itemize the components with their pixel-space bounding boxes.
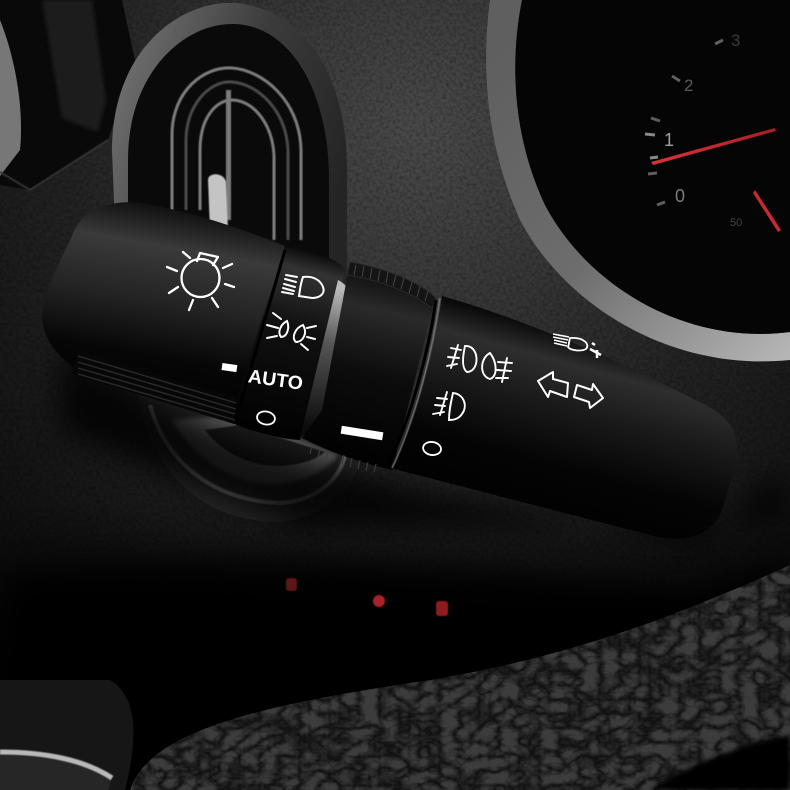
- icon: high beam: [282, 275, 324, 298]
- instrument cluster: [486, 0, 790, 361]
- gauge ticks: [645, 40, 723, 205]
- gauge numbers: [664, 31, 742, 229]
- icon: front fog light: [433, 392, 465, 420]
- gauge numbers: 3: [731, 31, 740, 50]
- light stalk: [42, 202, 737, 539]
- gauge numbers: 1: [664, 130, 674, 150]
- icon: right arrow: [574, 384, 603, 408]
- icon: side lights: [267, 313, 316, 350]
- side panel top left: [0, 0, 135, 190]
- mark: middle position line: [341, 426, 383, 440]
- lower black dash area: [0, 560, 790, 790]
- gauge numbers: 2: [684, 76, 693, 95]
- stalk shadow: [60, 350, 790, 545]
- air vent lower: [138, 395, 362, 522]
- gauge numbers: 50: [730, 217, 742, 229]
- bottom left trim: [0, 680, 133, 790]
- second (headlamp) ring: [236, 247, 345, 440]
- gauge needles: [651, 128, 776, 165]
- icon: master light: [167, 252, 234, 310]
- red warning lights: [286, 578, 448, 616]
- ring highlight: [300, 280, 350, 438]
- leather seat / wheel lower right: [130, 565, 790, 790]
- label: AUTO: AUTO: [247, 366, 304, 395]
- knurled top edge: [347, 262, 436, 308]
- stalk tip section: [390, 296, 737, 539]
- cap lower ribbed band: [72, 350, 236, 424]
- icon: beam flash: [553, 334, 601, 358]
- gauge numbers: 0: [675, 186, 685, 206]
- middle knurled section: [302, 262, 435, 470]
- icon: left arrow: [538, 372, 568, 397]
- icon: front and rear fog lights: [447, 345, 512, 382]
- icon: off circle on tip: [422, 441, 442, 456]
- air vent upper: [112, 3, 347, 300]
- knurled lower edge: [310, 446, 376, 472]
- stalk end cap: [42, 202, 285, 425]
- mark: cap position line: [222, 363, 237, 372]
- icon: off circle on ring: [256, 410, 276, 426]
